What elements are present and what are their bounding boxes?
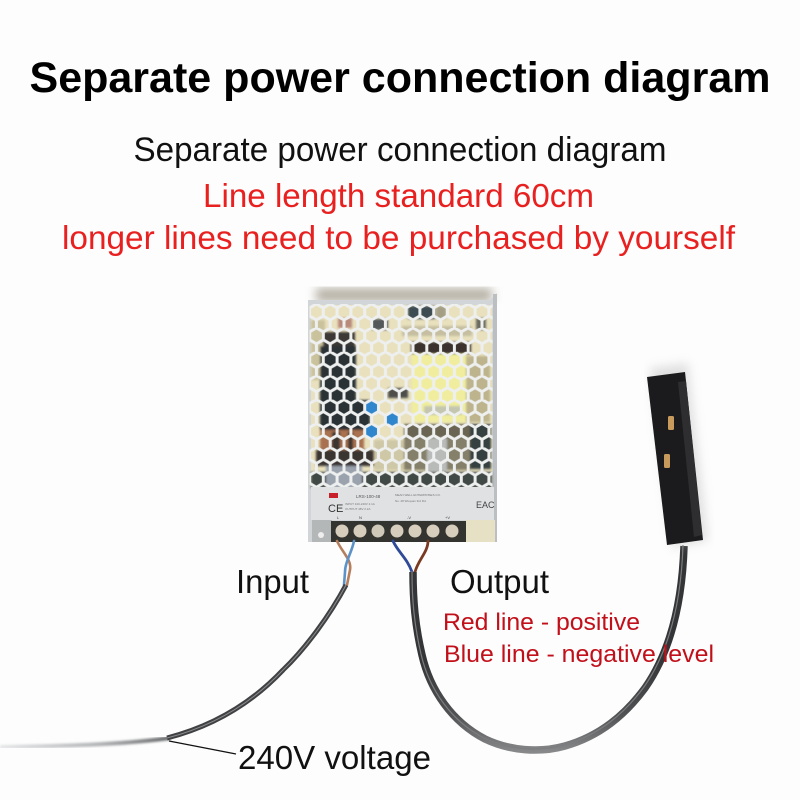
spec label strip: -V: [407, 515, 411, 520]
circuit board corner: [466, 520, 495, 542]
red note: line length: Line length standard 60cm: [203, 177, 594, 214]
spec label strip: +V: [445, 515, 450, 520]
spec label strip: INPUT 100-240V 2.1A: [345, 502, 375, 506]
label: input: Input: [236, 563, 309, 600]
connector contact: lower: [664, 454, 670, 468]
subtitle: Separate power connection diagram: [134, 131, 666, 169]
red note: longer lines: longer lines need to be purchased by yourself: [62, 219, 736, 256]
input cable: [0, 585, 346, 747]
spec label strip: [311, 487, 495, 520]
hexagonal mesh: [310, 304, 492, 488]
spec label strip: EAC: [476, 500, 495, 510]
metal foot: [312, 520, 332, 542]
spec label strip: LRS-100-48: [356, 494, 381, 499]
component layer: dark and coloured parts: [311, 306, 492, 488]
spec label strip: No. 28 Wuquan 3rd Rd.: [395, 499, 427, 503]
component layer: beige interior: [311, 305, 492, 488]
title: Separate power connection diagram: [30, 54, 770, 102]
spec label strip: L: [337, 515, 340, 520]
track connector: [647, 363, 708, 548]
power supply unit: [0, 288, 714, 776]
spec label strip: CE: [328, 503, 343, 515]
spec label strip: OUTPUT 48V 2.2A: [345, 507, 370, 511]
input wires: [337, 541, 354, 585]
connector contact: upper: [668, 416, 674, 430]
spec label strip: MEAN WELL ENTERPRISES CO.: [395, 493, 441, 497]
spec label strip: N: [359, 515, 362, 520]
leader line: [169, 741, 236, 754]
label: blue line negative: Blue line - negative level: [444, 641, 714, 668]
capacitors: blue: [365, 400, 400, 438]
output wires: [393, 541, 428, 572]
output cable: [412, 545, 684, 750]
label: red line positive: Red line - positive: [443, 609, 640, 636]
screw terminal block: [331, 521, 466, 542]
label: 240V voltage: 240V voltage: [238, 739, 431, 776]
label: output: Output: [450, 563, 549, 600]
